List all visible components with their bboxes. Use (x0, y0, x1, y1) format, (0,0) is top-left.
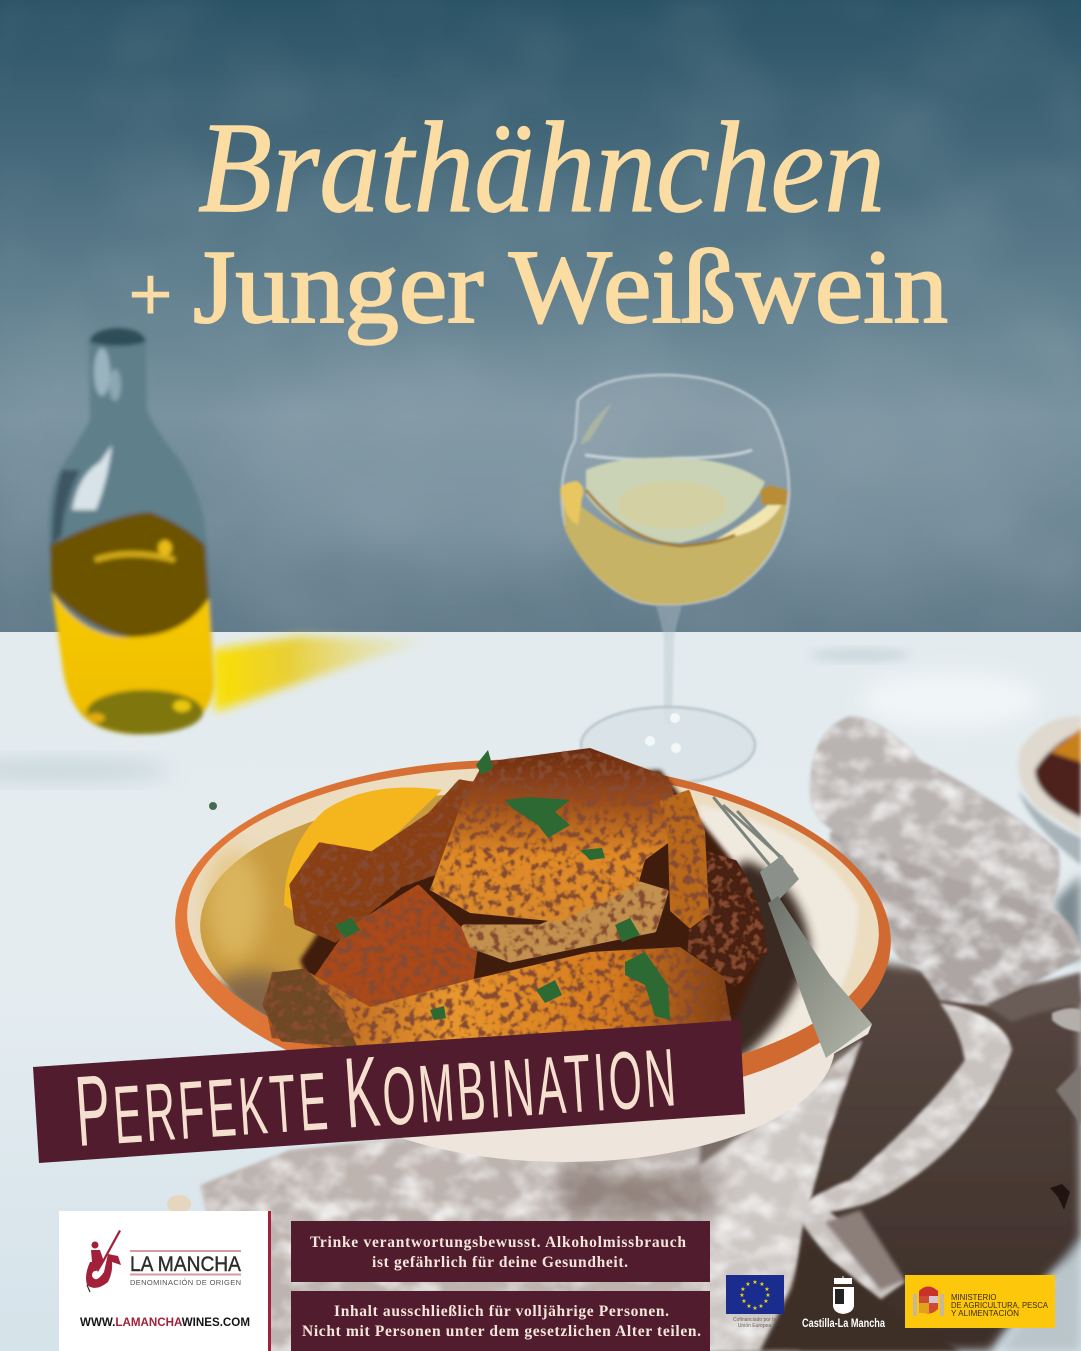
logo wordmark: DENOMINACIÓN DE ORIGEN (130, 1278, 241, 1287)
fork (714, 798, 872, 1058)
title: + (129, 253, 172, 337)
logo: european union: ★ (746, 1303, 752, 1310)
notice: responsible drinking: Trinke verantwortungsbewusst. Alkoholmissbrauch (310, 1234, 686, 1251)
logo: spanish ministry: Y ALIMENTACIÓN (951, 1309, 1019, 1318)
herb sprigs (335, 750, 670, 1020)
logo: european union: ★ (740, 1286, 746, 1293)
logo: european union: ★ (739, 1292, 745, 1299)
middle thigh (312, 888, 475, 1020)
wine glass (560, 375, 789, 783)
notice: responsible drinking (291, 1221, 710, 1282)
logo wordmark (130, 1250, 241, 1287)
icon: spanish coat of arms (913, 1286, 944, 1316)
notice: adults only: Nicht mit Personen unter dem gesetzlichen Alter teilen. (302, 1323, 701, 1340)
logo: european union: ★ (745, 1281, 751, 1288)
pale underside (464, 884, 666, 960)
logo: european union: Unión Europea (738, 1323, 771, 1329)
logo: european union: Cofinanciado por la (733, 1317, 776, 1323)
banner: perfekte kombination: PERFEKTE KOMBINATION (72, 1015, 682, 1167)
website url: WWW.LAMANCHAWINES.COM (80, 1317, 250, 1329)
logo: european union: ★ (758, 1303, 764, 1310)
linen napkin (200, 716, 1081, 1351)
logo: european union: ★ (741, 1298, 747, 1305)
lower fold edge (795, 1003, 1012, 1300)
logo: european union: ★ (759, 1281, 765, 1288)
notice: responsible drinking: ist gefährlich für deine Gesundheit. (372, 1254, 628, 1271)
right wing (662, 792, 707, 926)
notice: adults only: Inhalt ausschließlich für volljährige Personen. (334, 1303, 669, 1320)
logo: european union: ★ (765, 1292, 771, 1299)
title (129, 96, 948, 345)
upper fold (810, 716, 1081, 1006)
notice: adults only (291, 1291, 710, 1351)
logo: european union: ★ (752, 1305, 758, 1312)
dark table shadow, lower right (700, 875, 1081, 1351)
bone knuckle (264, 970, 355, 1045)
bottle shadow on table (212, 636, 430, 712)
plate (169, 748, 897, 1162)
grey swath under plate (200, 1040, 862, 1351)
logo: spanish ministry (905, 1275, 1055, 1328)
logo: spanish ministry: MINISTERIO (951, 1293, 996, 1302)
sauce bowl top right (1018, 716, 1081, 865)
drumstick (264, 947, 732, 1050)
title: Brathähnchen (198, 96, 885, 240)
logo: european union: ★ (763, 1298, 769, 1305)
logo: european union: ★ (752, 1279, 758, 1286)
dark back piece (690, 850, 765, 985)
rim (169, 748, 897, 1116)
roast chicken (264, 748, 765, 1050)
logo: european union (726, 1275, 784, 1329)
logo: castilla-la mancha (802, 1276, 885, 1330)
logo: castilla-la mancha: Castilla-La Mancha (802, 1318, 885, 1330)
main thigh (430, 748, 686, 922)
icon: don quixote rider logo (86, 1230, 121, 1292)
outer bowl (295, 928, 835, 1162)
dish interior (196, 794, 860, 1054)
left wing piece (292, 782, 505, 940)
logo wordmark: LA MANCHA (130, 1253, 241, 1276)
logo panel: la mancha (59, 1211, 271, 1351)
lemon wedge (284, 788, 442, 915)
title: Junger Weißwein (193, 228, 948, 345)
logo: spanish ministry: DE AGRICULTURA, PESCA (951, 1301, 1049, 1310)
dark base under pieces (300, 770, 765, 1040)
logo: european union: ★ (764, 1286, 770, 1293)
table crumbs (167, 802, 1070, 1213)
olive oil bottle (48, 328, 214, 734)
